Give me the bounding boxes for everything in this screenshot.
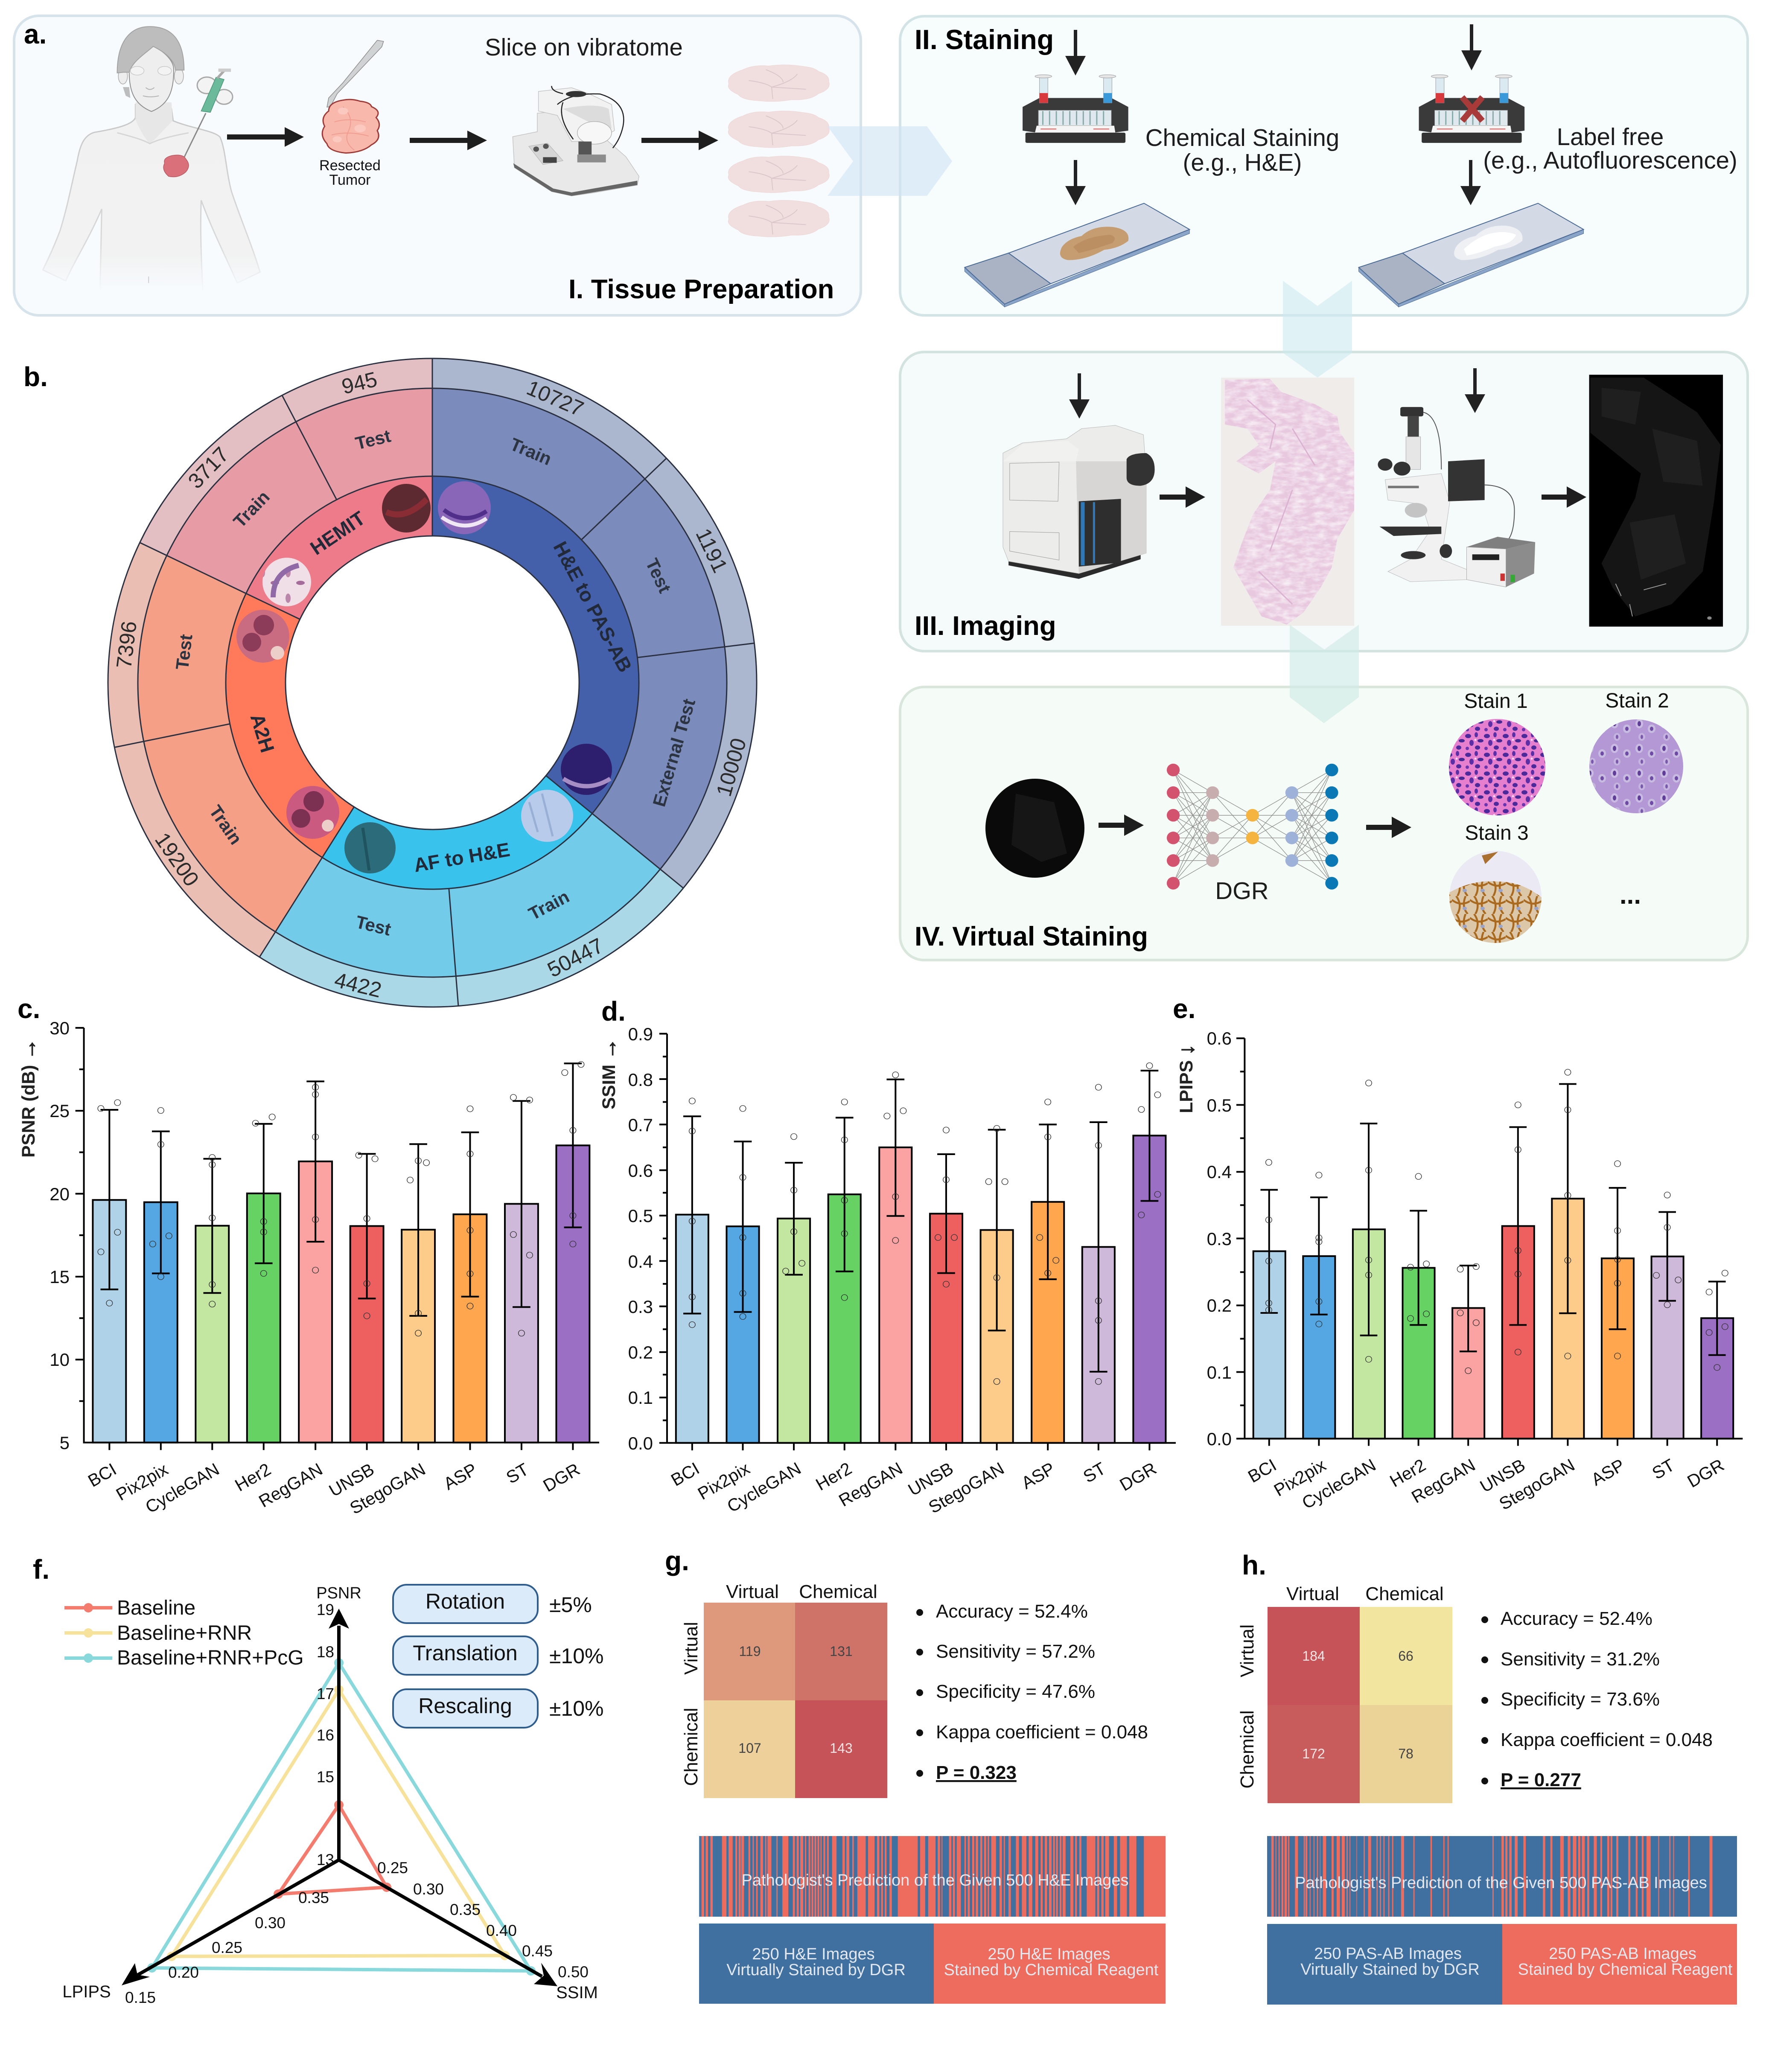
axis labels: SSIM: 0.40 <box>486 1922 517 1939</box>
axis labels: LPIPS: 0.20 <box>168 1964 199 1981</box>
heading: virtual staining: IV. Virtual Staining <box>915 922 1148 952</box>
y-axis tick labels: 0.2 <box>628 1342 653 1362</box>
arrow: patient to tumor <box>227 127 304 147</box>
y-axis tick labels: 10 <box>50 1350 70 1370</box>
axes <box>76 1028 599 1450</box>
bar: CycleGAN <box>195 1155 229 1443</box>
y-axis tick labels: 0.5 <box>1207 1095 1232 1115</box>
stripe bar: ground truth: Stained by Chemical Reagent <box>944 1961 1159 1979</box>
bar: BCI <box>93 1100 126 1443</box>
label: DGR: DGR <box>1215 877 1269 904</box>
panel b: dataset ring chart <box>0 247 868 1118</box>
bar: BCI <box>1253 1159 1285 1439</box>
x-axis labels: ASP <box>1018 1458 1058 1493</box>
image: stain 1 <box>1449 719 1545 815</box>
y-axis tick labels: 0.4 <box>628 1251 653 1272</box>
y-axis tick labels: 25 <box>50 1101 70 1121</box>
metrics list: Specificity = 73.6% <box>1501 1689 1660 1710</box>
counts: HEMIT: 3717 <box>184 442 233 493</box>
image: autofluorescence input <box>985 779 1084 878</box>
bar: DGR <box>1133 1063 1166 1443</box>
axis labels: SSIM: 0.50 <box>558 1963 589 1981</box>
stripe bar: pathologist prediction <box>699 1836 1166 1917</box>
augmentation: rotation: Rotation <box>425 1589 505 1613</box>
diagram: DGR network <box>1167 764 1338 890</box>
x-axis labels: ST <box>503 1459 532 1487</box>
x-axis labels: CycleGAN <box>1299 1455 1379 1513</box>
labels: train and test sectors: Test <box>172 633 196 671</box>
confusion matrix: 66 <box>1398 1648 1413 1664</box>
legend: Baseline+RNR+PcG <box>117 1647 304 1669</box>
axis labels: LPIPS <box>62 1889 329 2006</box>
icon: label-free slide <box>1359 203 1583 307</box>
axis labels: SSIM <box>377 1859 598 2002</box>
counts: A2H: 7396 <box>112 620 141 670</box>
bars with error bars and data points <box>659 1034 1176 1450</box>
labels: train and test sectors: Test <box>642 555 675 596</box>
axis title: LPIPS: LPIPS <box>1176 1060 1197 1113</box>
bars with error bars and data points <box>1236 1038 1743 1446</box>
stripe bar: ground truth: Virtually Stained by DGR <box>1300 1961 1480 1979</box>
bar: Her2 <box>247 1114 280 1443</box>
confusion matrix: Chemical <box>799 1581 877 1602</box>
labels: dataset names: H&E to PAS-AB <box>549 538 636 676</box>
y-axis tick labels: 0.0 <box>628 1433 653 1453</box>
icon: stained slide <box>965 203 1189 307</box>
labels: dataset names: HEMIT <box>306 507 369 559</box>
arrow: into chemical stainer <box>1065 30 1086 76</box>
bar: Pix2pix <box>726 1106 759 1443</box>
panel d: SSIM bar chart <box>597 996 1176 1517</box>
counts: A2H: 19200 <box>150 828 204 890</box>
metrics list: Accuracy = 52.4% <box>1501 1608 1652 1629</box>
bar: ST <box>1652 1192 1684 1439</box>
x-axis labels: StegoGAN <box>1496 1455 1578 1514</box>
icon: slide scanner <box>1003 425 1155 579</box>
icon: label-free stainer with cross <box>1419 75 1524 143</box>
label: resected tumor: Resected <box>319 157 381 174</box>
panel g: H&E Turing test <box>665 1545 1166 2004</box>
radar series: Baseline <box>274 1800 391 1899</box>
y-axis tick labels: 0.1 <box>1207 1362 1232 1382</box>
panel letter c: c. <box>17 993 40 1024</box>
augmentation: rotation: ±5% <box>549 1593 592 1617</box>
panel: staining <box>900 16 1748 315</box>
icon: chemical stainer <box>1023 75 1128 143</box>
panel letter d: d. <box>601 996 626 1027</box>
x-axis labels: StegoGAN <box>925 1458 1007 1517</box>
arrow: scanner to H&E image <box>1160 486 1205 508</box>
y-axis tick labels: 0.7 <box>628 1115 653 1135</box>
bar: UNSB <box>350 1152 384 1443</box>
icon: vibratome <box>513 86 639 196</box>
metrics list: P = 0.277 <box>1501 1769 1581 1790</box>
y-axis tick labels: 0.8 <box>628 1070 653 1090</box>
x-axis labels: Her2 <box>813 1458 855 1494</box>
x-axis labels <box>85 1459 583 1518</box>
metrics list: P = 0.323 <box>936 1762 1017 1783</box>
confusion matrix <box>1237 1583 1452 1803</box>
x-axis labels: ST <box>1649 1455 1678 1483</box>
label: slice on vibratome: Slice on vibratome <box>485 34 683 61</box>
x-axis labels: UNSB <box>1477 1455 1529 1496</box>
labels: train and test sectors: Train <box>507 434 554 469</box>
bar: ASP <box>1602 1161 1634 1439</box>
arrow: input to DGR <box>1099 815 1144 836</box>
bar: ST <box>1082 1084 1115 1443</box>
axes <box>659 1034 1176 1450</box>
axis labels: SSIM: 0.30 <box>413 1880 444 1898</box>
bar: UNSB <box>1502 1102 1534 1439</box>
stripe bar: ground truth <box>699 1924 1166 2004</box>
bar: Pix2pix <box>144 1107 178 1443</box>
arrow: tumor to vibratome <box>410 131 487 150</box>
augmentation: rescaling: ±10% <box>549 1697 604 1720</box>
metrics list: Kappa coefficient = 0.048 <box>936 1722 1148 1743</box>
bars with error bars and data points <box>76 1028 599 1450</box>
labels: dataset names: A2H <box>246 711 279 755</box>
panel letter g: g. <box>665 1545 689 1576</box>
counts: HEMIT: 945 <box>339 367 379 399</box>
metrics list <box>916 1601 1148 1783</box>
labels: train and test sectors: Train <box>525 886 572 924</box>
icon: fluorescence microscope <box>1378 407 1535 587</box>
arrow: into microscope <box>1465 368 1485 413</box>
counts: H&E to PAS-AB: 10000 <box>712 736 751 799</box>
x-axis labels <box>667 1458 1160 1517</box>
icon: tissue slices <box>728 65 829 237</box>
x-axis labels <box>1244 1455 1728 1514</box>
y-axis tick labels: 0.6 <box>628 1161 653 1181</box>
x-axis labels: UNSB <box>326 1459 377 1501</box>
bar: RegGAN <box>1452 1263 1484 1439</box>
icon: patient with biopsy <box>43 26 260 292</box>
counts: H&E to PAS-AB <box>523 375 751 799</box>
arrow: tissue preparation to staining <box>828 126 952 196</box>
axis title: LPIPS: ↓ <box>1174 1045 1198 1055</box>
legend <box>64 1597 304 1669</box>
bar: ASP <box>454 1106 487 1443</box>
axis labels: PSNR: 15 <box>317 1768 334 1786</box>
augmentation: rotation <box>393 1585 592 1623</box>
augmentation: rescaling: Rescaling <box>418 1694 512 1718</box>
arrow: into label-free stainer <box>1461 24 1482 70</box>
confusion matrix: 184 <box>1302 1648 1325 1664</box>
heading: staining: II. Staining <box>915 24 1054 55</box>
axis labels: PSNR: 19 <box>317 1601 334 1618</box>
metrics list: Sensitivity = 57.2% <box>936 1641 1095 1662</box>
x-axis labels: UNSB <box>905 1458 957 1500</box>
bar: Pix2pix <box>1303 1172 1335 1439</box>
y-axis tick labels <box>50 1018 70 1453</box>
counts: H&E to PAS-AB: 1191 <box>691 525 732 576</box>
augmentation: translation: ±10% <box>549 1644 604 1668</box>
axis title: PSNR: PSNR (dB) <box>18 1065 39 1158</box>
counts: H&E to PAS-AB: 10727 <box>523 375 587 421</box>
x-axis labels: DGR <box>1684 1455 1728 1491</box>
y-axis tick labels <box>1207 1028 1232 1449</box>
confusion matrix: Chemical <box>1365 1583 1444 1604</box>
metrics list: Specificity = 47.6% <box>936 1681 1095 1702</box>
y-axis tick labels: 0.4 <box>1207 1162 1232 1182</box>
augmentation: rescaling <box>393 1689 604 1728</box>
stripe bar: ground truth: Stained by Chemical Reagent <box>1518 1961 1733 1979</box>
y-axis tick labels: 0.3 <box>628 1297 653 1317</box>
ring: outer counts <box>0 247 868 1118</box>
axis labels: LPIPS: LPIPS <box>62 1982 111 2001</box>
confusion matrix: 131 <box>830 1644 853 1659</box>
axis labels: LPIPS: 0.30 <box>255 1914 286 1932</box>
bar: ST <box>505 1094 538 1443</box>
x-axis labels: Pix2pix <box>694 1458 753 1504</box>
label: stain 3: Stain 3 <box>1465 822 1529 844</box>
y-axis tick labels: 0.0 <box>1207 1429 1232 1449</box>
x-axis labels: RegGAN <box>255 1459 326 1511</box>
icon: resected tumor and scalpel <box>322 40 384 153</box>
arrow: DGR to stains <box>1366 817 1411 838</box>
metrics list <box>1481 1608 1713 1790</box>
metrics list: Accuracy = 52.4% <box>936 1601 1088 1622</box>
y-axis tick labels: 15 <box>50 1267 70 1287</box>
confusion matrix: Virtual <box>1286 1583 1339 1604</box>
arrow: imaging to virtual staining <box>1290 625 1359 723</box>
panel e: LPIPS bar chart <box>1173 993 1743 1514</box>
label: stain 2: Stain 2 <box>1605 690 1669 712</box>
bar: UNSB <box>930 1127 962 1443</box>
arrow: into scanner <box>1069 373 1090 419</box>
confusion matrix: 172 <box>1302 1746 1325 1761</box>
radar series: Baseline+RNR+PcG <box>147 1658 536 1976</box>
axis title: SSIM: SSIM <box>599 1065 619 1109</box>
axis labels: PSNR: 16 <box>317 1726 334 1744</box>
panel letter a: a. <box>24 19 47 49</box>
stripe bar: pathologist prediction: Pathologist's Prediction of the Given 500 PAS-AB Images <box>1295 1874 1707 1892</box>
labels: train and test sectors: Test <box>354 912 393 940</box>
axis title: SSIM: → <box>597 1038 621 1059</box>
metrics list: Sensitivity = 31.2% <box>1501 1649 1660 1670</box>
y-axis tick labels: 0.6 <box>1207 1028 1232 1048</box>
axis labels: SSIM: SSIM <box>556 1983 598 2002</box>
bar: RegGAN <box>879 1072 912 1443</box>
confusion matrix: Chemical <box>681 1708 702 1786</box>
confusion matrix: 143 <box>830 1740 853 1756</box>
panel f: radar chart <box>33 1554 604 2006</box>
axis title: PSNR: → <box>17 1039 41 1060</box>
panel h: PAS-AB Turing test <box>1237 1550 1737 2005</box>
arrow: vibratome to slices <box>641 131 718 150</box>
legend: Baseline <box>117 1597 195 1619</box>
axis labels: SSIM: 0.35 <box>450 1901 481 1918</box>
image: H&E whole slide <box>1221 378 1354 626</box>
image: stain 2 <box>1589 719 1683 813</box>
axis labels: PSNR <box>316 1584 361 1868</box>
bar: DGR <box>556 1062 589 1443</box>
axis labels: PSNR: PSNR <box>316 1584 361 1602</box>
x-axis labels: ASP <box>440 1459 481 1494</box>
y-axis tick labels: 30 <box>50 1018 70 1038</box>
confusion matrix <box>681 1581 887 1798</box>
panel letter e: e. <box>1173 993 1195 1024</box>
bar: ASP <box>1032 1099 1064 1443</box>
bar: StegoGAN <box>1552 1069 1584 1439</box>
y-axis tick labels: 0.3 <box>1207 1229 1232 1249</box>
x-axis labels: RegGAN <box>1408 1455 1478 1507</box>
image: tissue thumbnails <box>236 481 612 873</box>
label: stain 1: Stain 1 <box>1464 690 1528 713</box>
x-axis labels: BCI <box>1244 1455 1279 1487</box>
bar: StegoGAN <box>402 1144 435 1443</box>
label: ellipsis: ... <box>1620 881 1641 909</box>
labels: dataset names <box>246 507 636 876</box>
image: autofluorescence whole slide <box>1589 375 1723 627</box>
confusion matrix: 78 <box>1398 1746 1413 1761</box>
labels: train and test sectors <box>172 426 699 940</box>
confusion matrix: Virtual <box>1237 1624 1258 1677</box>
arrow: down to label-free slide <box>1460 160 1481 205</box>
y-axis tick labels: 20 <box>50 1184 70 1204</box>
image: stain 3 <box>1447 851 1545 945</box>
x-axis labels: DGR <box>540 1459 583 1496</box>
labels: dataset names: AF to H&E <box>412 838 511 876</box>
augmentation: translation <box>393 1636 604 1675</box>
confusion matrix: 119 <box>739 1644 761 1659</box>
confusion matrix: Virtual <box>726 1581 779 1602</box>
panel: virtual staining <box>900 687 1748 960</box>
heading: imaging: III. Imaging <box>915 611 1056 641</box>
axis labels: PSNR: 13 <box>317 1851 334 1868</box>
labels: train and test sectors: Train <box>205 801 246 848</box>
bar: RegGAN <box>299 1081 332 1443</box>
confusion matrix: Virtual <box>681 1622 702 1675</box>
radar series: Baseline+RNR <box>167 1685 510 1961</box>
bar: CycleGAN <box>1353 1080 1385 1439</box>
axis labels: LPIPS: 0.25 <box>212 1939 242 1956</box>
y-axis tick labels <box>628 1024 653 1453</box>
metrics list: Kappa coefficient = 0.048 <box>1501 1729 1713 1750</box>
y-axis tick labels: 0.5 <box>628 1206 653 1226</box>
counts: HEMIT <box>184 367 379 493</box>
x-axis labels: DGR <box>1116 1458 1160 1495</box>
y-axis tick labels: 0.2 <box>1207 1295 1232 1315</box>
x-axis labels: CycleGAN <box>142 1459 223 1517</box>
stripe bar: ground truth: 250 PAS-AB Images <box>1314 1945 1462 1963</box>
x-axis labels: Pix2pix <box>113 1459 172 1505</box>
stripe bar: pathologist prediction: Pathologist's Prediction of the Given 500 H&E Images <box>741 1871 1129 1889</box>
panel: imaging <box>900 352 1748 651</box>
axis labels: PSNR: 17 <box>317 1685 334 1702</box>
arrow: microscope to AF image <box>1542 486 1586 508</box>
counts: AF to H&E: 4422 <box>332 968 384 1002</box>
x-axis labels: Her2 <box>1387 1455 1429 1491</box>
axis labels: LPIPS: 0.35 <box>298 1889 329 1906</box>
confusion matrix: Chemical <box>1237 1710 1258 1789</box>
labels: train and test sectors: Test <box>353 426 393 454</box>
label: chemical staining example: (e.g., H&E) <box>1183 149 1302 176</box>
axis labels: SSIM: 0.45 <box>522 1942 553 1960</box>
x-axis labels: BCI <box>667 1458 702 1490</box>
augmentation: translation: Translation <box>413 1641 518 1665</box>
stripe bar: pathologist prediction <box>1267 1836 1737 1917</box>
panel letter f: f. <box>33 1554 50 1585</box>
bar: CycleGAN <box>778 1134 810 1443</box>
counts: AF to H&E <box>332 934 607 1002</box>
bar: BCI <box>676 1098 708 1443</box>
bar: Her2 <box>1403 1173 1435 1439</box>
axis labels: SSIM: 0.25 <box>377 1859 408 1877</box>
stripe bar: ground truth: Virtually Stained by DGR <box>726 1961 906 1979</box>
x-axis labels: ST <box>1080 1458 1109 1487</box>
axis labels: PSNR: 18 <box>317 1643 334 1661</box>
ring: dataset names <box>184 434 681 931</box>
bar: Her2 <box>828 1099 861 1443</box>
panel letter b: b. <box>23 361 48 392</box>
y-axis tick labels: 0.9 <box>628 1024 653 1044</box>
x-axis labels: Her2 <box>232 1459 274 1495</box>
x-axis labels: RegGAN <box>835 1458 906 1510</box>
x-axis labels: ASP <box>1588 1455 1628 1490</box>
arrow: staining to imaging <box>1283 281 1352 378</box>
x-axis labels: CycleGAN <box>724 1458 804 1516</box>
counts: A2H <box>112 620 204 890</box>
panel letter h: h. <box>1242 1550 1266 1580</box>
x-axis labels: Pix2pix <box>1271 1455 1329 1500</box>
panel c: PSNR bar chart <box>17 993 599 1518</box>
label: label free: Label free <box>1557 123 1664 150</box>
labels: train and test sectors: Train <box>229 487 274 532</box>
stripe bar: ground truth <box>1267 1924 1737 2005</box>
ring: train and test sectors <box>80 330 785 1035</box>
label: chemical staining: Chemical Staining <box>1145 124 1339 151</box>
stripe bar: ground truth: 250 H&E Images <box>752 1945 875 1963</box>
arrow: down to stained slide <box>1065 160 1086 205</box>
axis labels: LPIPS: 0.15 <box>125 1989 156 2006</box>
confusion matrix: 107 <box>738 1740 761 1756</box>
labels: train and test sectors: External Test <box>649 696 699 809</box>
y-axis tick labels: 0.1 <box>628 1388 653 1408</box>
stripe bar: ground truth: 250 H&E Images <box>988 1945 1110 1963</box>
axes <box>1236 1038 1743 1446</box>
legend: Baseline+RNR <box>117 1622 252 1644</box>
heading: tissue preparation: I. Tissue Preparation <box>568 274 834 304</box>
panel a: tissue preparation <box>14 16 861 315</box>
label: tumor: Tumor <box>329 172 370 188</box>
x-axis labels: BCI <box>85 1459 119 1491</box>
label: label free example: (e.g., Autofluorescence) <box>1483 147 1737 174</box>
y-axis tick labels: 5 <box>60 1433 70 1453</box>
radar axes <box>122 1609 557 1986</box>
stripe bar: ground truth: 250 PAS-AB Images <box>1549 1945 1696 1963</box>
x-axis labels: StegoGAN <box>347 1459 428 1518</box>
bar: StegoGAN <box>981 1126 1013 1443</box>
bar: DGR <box>1701 1270 1733 1439</box>
counts: AF to H&E: 50447 <box>544 934 607 982</box>
